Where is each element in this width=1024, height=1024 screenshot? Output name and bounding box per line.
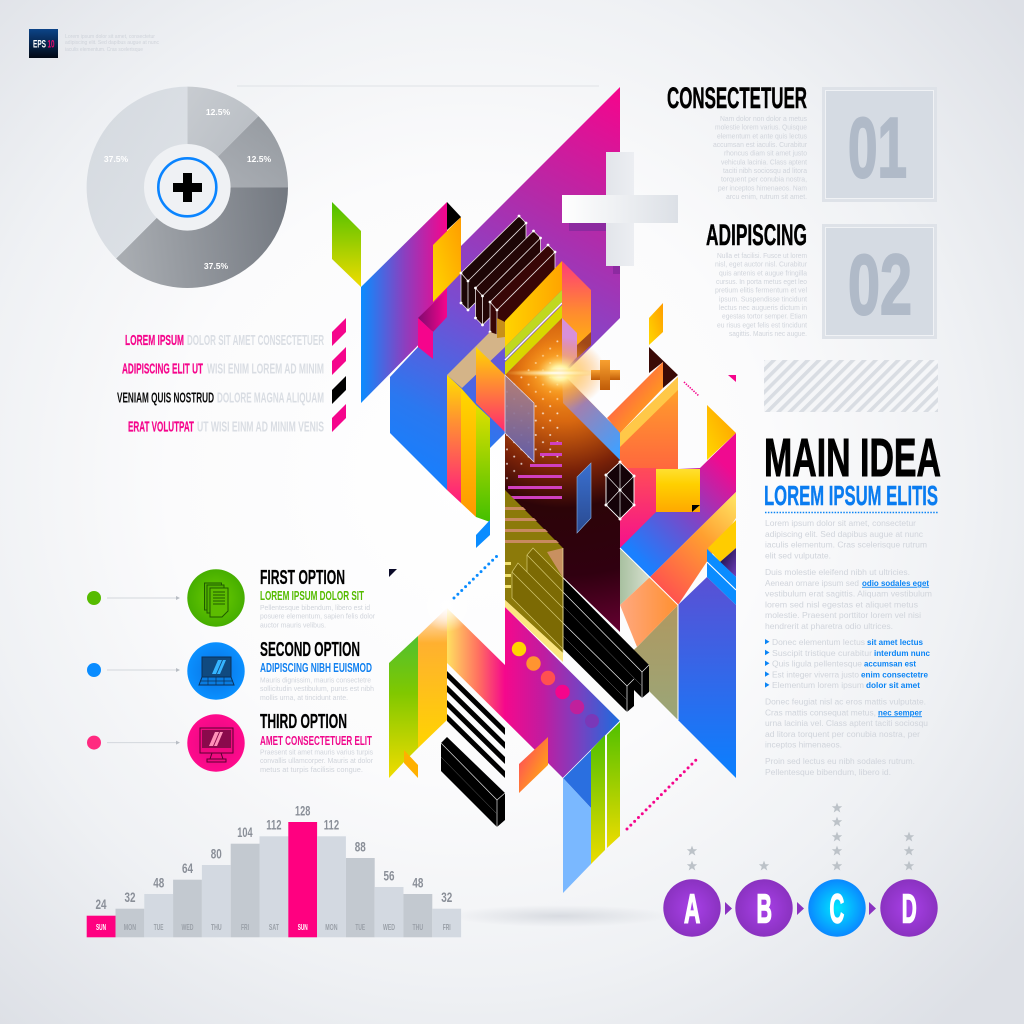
step circles: B xyxy=(756,886,772,932)
body block one: torquent per conubia nostra, xyxy=(721,175,807,184)
main body text: Quis ligula pellentesque xyxy=(772,659,862,669)
body block two: pretium elitis fermentum et vel xyxy=(715,286,807,295)
body block two: lectus nec augueris dictum in xyxy=(719,303,807,312)
third option text: Praesent sit amet mauris varius turpis xyxy=(260,748,373,756)
second option text: mollis urna, at tincidunt ante. xyxy=(260,693,348,702)
pie chart xyxy=(87,87,288,288)
number box 01 xyxy=(822,87,937,202)
heading consectetuer: CONSECTETUER xyxy=(667,82,807,115)
number box 02 xyxy=(822,224,937,339)
main body text: Cras mattis consequat metus, xyxy=(765,707,876,717)
logo description xyxy=(65,34,159,53)
main body text: elit sed vulputate. xyxy=(765,550,831,560)
dotted circles trail xyxy=(512,642,599,728)
main body text: urna lacinia vel. Class aptent taciti sociosqu xyxy=(765,718,928,728)
yellow triangle xyxy=(707,405,736,460)
second option text: Mauris dignissim, mauris consectetre xyxy=(260,676,371,684)
blue stripe xyxy=(707,549,736,605)
blue magenta shard xyxy=(361,202,447,403)
main body text: sit amet lectus xyxy=(867,637,923,647)
navy triangle xyxy=(389,569,397,577)
main body text: vestibulum erat sagittis. Aliquam vestibulum xyxy=(765,589,932,599)
list rows: WISI ENIM LOREM AD MINIM xyxy=(207,360,324,378)
pink yellow shard xyxy=(519,737,548,793)
logo description: Lorem ipsum dolor sit amet, consectetur xyxy=(65,34,155,40)
step circles xyxy=(663,879,938,937)
main body text: Suscipit tristique curabitur xyxy=(772,648,872,658)
blue panel xyxy=(577,463,591,533)
body block two: sagittis. Mauris nec augue. xyxy=(729,329,807,338)
step circles: D xyxy=(902,886,917,932)
option third xyxy=(87,710,373,774)
bar day labels: SUN xyxy=(298,922,308,932)
orange bar xyxy=(650,492,736,605)
bar values: 24 xyxy=(96,896,107,912)
bar day labels: SUN xyxy=(96,922,106,932)
big white plus xyxy=(562,152,678,266)
first option text: Pellentesque bibendum, libero est id xyxy=(260,603,370,612)
translucent tan band xyxy=(447,332,505,388)
pink orange facet xyxy=(562,261,591,362)
wireframe bars xyxy=(461,216,555,339)
option first xyxy=(87,566,375,629)
step circles: A xyxy=(684,886,700,932)
first option text: posuere elementum, sapien felis dolor xyxy=(260,612,375,621)
main body text xyxy=(765,518,932,777)
main body text: Donec feugiat nisl ac eros mattis vulputate. xyxy=(765,696,926,706)
magenta prism xyxy=(418,290,447,359)
yellow band xyxy=(505,261,562,375)
main body text: Proin sed lectus eu nibh sodales rutrum. xyxy=(765,756,915,766)
body block two: egestas tortor semper. Etiam xyxy=(722,312,807,321)
body block two: Nulla et facilisi. Fusce ut lorem xyxy=(717,251,807,260)
gold translucent panel xyxy=(505,490,563,662)
main body text: ad litora torquent per conubia nostra, per xyxy=(765,729,920,739)
black bar xyxy=(441,737,505,827)
bar day labels: WED xyxy=(182,922,194,932)
navy corner xyxy=(720,548,736,577)
lavender facet xyxy=(562,318,577,373)
bar day labels: THU xyxy=(412,922,423,932)
main body text: Donec elementum lectus xyxy=(772,637,865,647)
bar values xyxy=(96,802,452,912)
first option text xyxy=(260,566,375,629)
body block one: arcu enim, rutrum sit amet. xyxy=(726,192,807,201)
light flare xyxy=(503,337,607,409)
bar chart xyxy=(87,802,461,937)
list rows: VENIAM QUIS NOSTRUD xyxy=(117,390,214,406)
connector third xyxy=(87,736,180,750)
main body text: iaculis elementum. Cras scelerisque rutrum xyxy=(765,540,927,550)
bar values: 48 xyxy=(412,874,424,890)
main body text: enim consectetre xyxy=(861,669,928,679)
first option text: LOREM IPSUM DOLOR SIT xyxy=(260,588,364,603)
lower blue facets xyxy=(563,721,620,893)
body block two: quis antenis et augue fringilla xyxy=(719,268,808,277)
orange facet xyxy=(476,347,505,432)
pie chart: 12.5% xyxy=(206,107,231,117)
list rows: DOLOR SIT AMET CONSECTETUER xyxy=(187,332,324,349)
bar values: 104 xyxy=(237,824,253,840)
apex glow xyxy=(421,580,473,632)
hatch panel xyxy=(764,360,938,412)
bar values: 56 xyxy=(384,868,395,884)
left yellow column xyxy=(418,608,447,748)
pink facet xyxy=(620,468,656,548)
black diagonal stripes xyxy=(447,671,505,778)
main body text: inceptos himenaeos. xyxy=(765,740,842,750)
main body text: Est integer viverra justo xyxy=(772,669,859,679)
blue magenta facet xyxy=(620,433,736,577)
body block two xyxy=(715,251,808,338)
bar day labels xyxy=(96,922,451,932)
bar day labels: SAT xyxy=(269,922,279,932)
wireframe hexagon xyxy=(604,460,636,520)
connector first xyxy=(87,591,180,605)
bar values: 32 xyxy=(124,889,136,905)
body block one: per inceptos himenaeos. Nam xyxy=(718,183,807,192)
body block one: rhoncus diam sit amet justo xyxy=(724,149,807,158)
pie chart: 37.5% xyxy=(104,154,129,164)
lower magenta shape xyxy=(447,607,620,778)
body block one: molestie lorem varius. Quisque xyxy=(715,123,807,132)
main body text: Elementum lorem ipsum xyxy=(772,680,864,690)
list rows: DOLORE MAGNA ALIQUAM xyxy=(217,390,324,406)
number box 01: 01 xyxy=(848,101,907,196)
brown facet xyxy=(577,332,591,358)
second option text: SECOND OPTION xyxy=(260,638,360,661)
logo description: iaculis elementum. Cras scelerisque xyxy=(65,47,143,53)
bar day labels: MON xyxy=(124,922,136,932)
blue big column xyxy=(678,577,736,778)
body block two: eu risus eget felis est tincidunt xyxy=(717,320,807,329)
small orange plus xyxy=(591,360,620,390)
pie chart: 12.5% xyxy=(247,154,272,164)
second option text xyxy=(260,638,374,702)
step circles: C xyxy=(830,886,844,932)
body block two: nisl, eget auctor nisl. Curabitur xyxy=(715,260,807,269)
main body text: accumsan est xyxy=(864,659,916,669)
pie chart: 37.5% xyxy=(204,261,229,271)
second option text: sollicitudin vestibulum, purus est nibh xyxy=(260,684,374,693)
body block one: taciti nibh sociosqu ad litora xyxy=(723,166,808,175)
main body text: odio sodales eget xyxy=(862,578,929,588)
diagonal light band xyxy=(562,373,620,460)
heading adipiscing: ADIPISCING xyxy=(706,219,807,252)
yellow square xyxy=(656,469,700,512)
logo badge: EPS xyxy=(33,39,46,51)
colour columns xyxy=(447,375,490,548)
glass panel xyxy=(505,375,534,462)
orange shard xyxy=(649,303,663,345)
magenta dotted line xyxy=(627,757,699,829)
main body text: molestie. Praesent porttitor lorem vel nisi xyxy=(765,610,921,620)
body block one xyxy=(713,114,808,201)
icon: monitor xyxy=(187,714,245,772)
body block one: elementum et ante quis lectus xyxy=(717,131,807,140)
left green column xyxy=(389,636,418,778)
logo badge xyxy=(29,29,58,58)
first option text: FIRST OPTION xyxy=(260,566,345,589)
dotted rule xyxy=(765,512,938,514)
bar day labels: WED xyxy=(383,922,395,932)
bar day labels: FRI xyxy=(443,922,451,932)
second option text: ADIPISCING NIBH EUISMOD xyxy=(260,660,372,675)
magenta stair stripes xyxy=(507,442,562,499)
bar values: 112 xyxy=(324,817,339,833)
logo badge: 10 xyxy=(48,39,54,51)
main body text: Aenean ornare ipsum sed xyxy=(765,578,859,588)
third option text xyxy=(260,710,373,774)
central geometric artwork xyxy=(332,87,736,893)
blue dotted line xyxy=(454,555,498,598)
first option text: auctor mauris velibus. xyxy=(260,620,326,629)
bar day labels: TUE xyxy=(154,922,164,932)
third option text: metus at turpis facilisis congue. xyxy=(260,765,363,774)
bar values: 112 xyxy=(266,817,282,833)
list rows: LOREM IPSUM xyxy=(125,332,184,349)
wireframe nodes xyxy=(460,215,556,340)
bar values: 32 xyxy=(441,889,452,905)
third option text: convallis ullamcorper. Mauris at dolor xyxy=(260,756,373,765)
main body text: Lorem ipsum dolor sit amet, consectetur xyxy=(765,518,916,528)
rating stars xyxy=(687,803,914,870)
body block two: cursus. In porta metus eget leo xyxy=(716,277,807,286)
list rows: ADIPISCING ELIT UT xyxy=(122,360,203,378)
dark central column xyxy=(505,318,620,632)
orange block xyxy=(607,362,678,480)
body block one: accumsan est iaculis. Curabitur xyxy=(713,140,807,149)
pink dash line xyxy=(684,382,699,396)
connector second xyxy=(87,663,180,677)
list markers xyxy=(332,318,346,432)
small orange shard xyxy=(404,750,418,778)
main body text: Pellentesque bibendum, libero id. xyxy=(765,767,891,777)
bar values: 64 xyxy=(182,860,193,876)
list rows: ERAT VOLUTPAT xyxy=(128,418,194,436)
bar values: 128 xyxy=(295,802,310,818)
big plus shadow xyxy=(569,223,620,274)
bar day labels: TUE xyxy=(355,922,365,932)
translucent tan column xyxy=(620,548,678,720)
icon: laptop xyxy=(187,642,245,700)
main body text: hendrerit at pharetra odio ultrices. xyxy=(765,621,893,631)
body block one: Nam dolor non dolor a metus xyxy=(720,114,807,123)
bar values: 48 xyxy=(153,874,164,890)
bar values: 80 xyxy=(211,846,222,862)
floor shadow xyxy=(450,905,670,927)
bar values: 88 xyxy=(355,838,366,854)
main body text: adipiscing elit. Sed dapibus augue at nunc xyxy=(765,529,924,539)
number box 02: 02 xyxy=(848,238,912,333)
main body text: Duis molestie eleifend nibh ut ultricies. xyxy=(765,567,910,577)
top rule xyxy=(237,86,599,87)
logo description: adipiscing elit. Sed dapibus augue at nunc xyxy=(65,40,159,46)
gold corner xyxy=(708,520,736,562)
third option text: THIRD OPTION xyxy=(260,710,347,733)
dark shard xyxy=(649,347,678,388)
main body text: nec semper xyxy=(878,707,923,717)
main body text: dolor sit amet xyxy=(866,680,920,690)
lower green columns xyxy=(591,722,620,864)
body block one: vehicula lacinia. Class aptent xyxy=(721,157,807,166)
third option text: AMET CONSECTETUER ELIT xyxy=(260,733,372,748)
black isometric bars xyxy=(512,548,649,712)
main body text: interdum nunc xyxy=(874,648,930,658)
icon: documents xyxy=(187,569,245,627)
list rows xyxy=(117,332,324,436)
main body text: lorem sed nisl egestas et aliquet metus xyxy=(765,599,918,609)
option second xyxy=(87,638,374,702)
bar day labels: MON xyxy=(325,922,338,932)
violet main shape xyxy=(390,87,620,490)
dark diagonal xyxy=(620,433,634,460)
gold marker xyxy=(497,318,505,338)
pink corner xyxy=(728,375,736,382)
list rows: UT WISI EINM AD MINIM VENIS xyxy=(197,418,324,436)
yellow block xyxy=(433,202,461,302)
dot grid xyxy=(505,330,562,490)
bar day labels: FRI xyxy=(241,922,249,932)
green shard xyxy=(332,202,361,287)
body block two: ipsum. Suspendisse tincidunt xyxy=(719,294,807,303)
bar day labels: THU xyxy=(211,922,222,932)
